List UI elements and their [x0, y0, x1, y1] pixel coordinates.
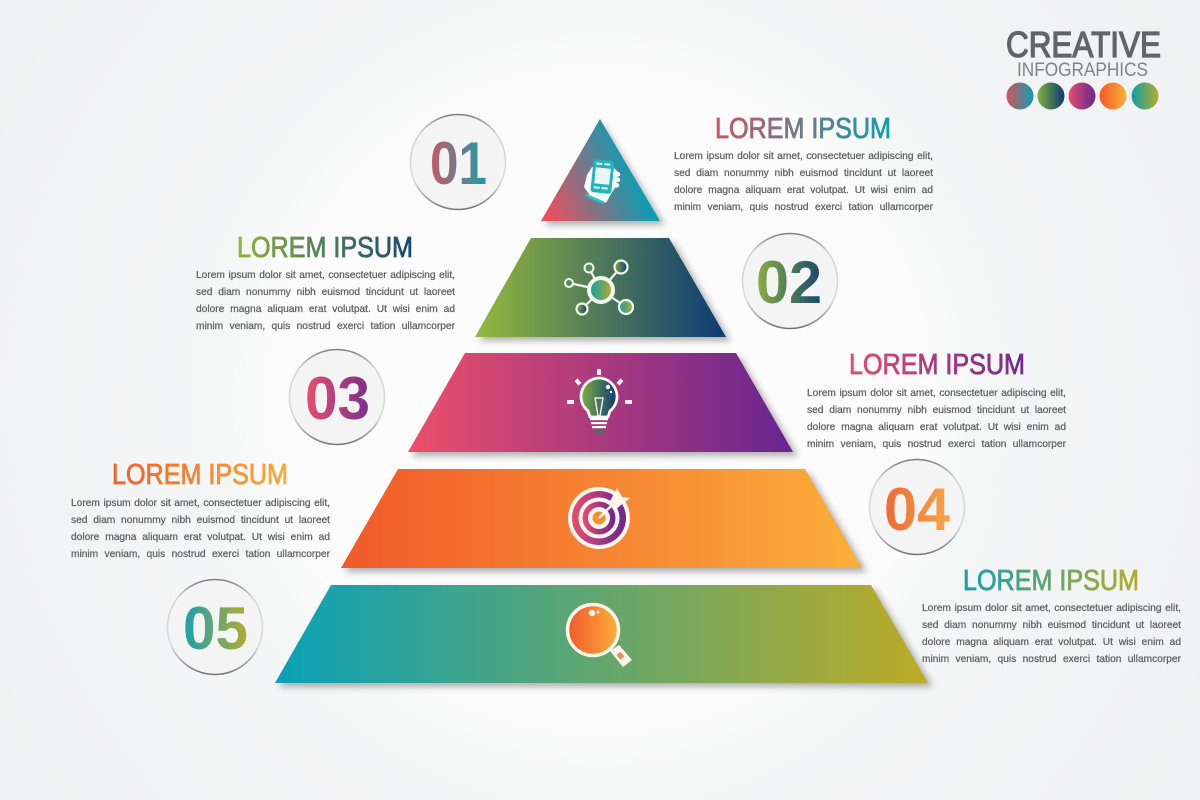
- heading 1: LOREM IPSUM: [715, 113, 891, 145]
- text block 2: sed diam nonummy nibh euismod tincidunt ut laoreet: [196, 287, 455, 298]
- number badge 05: [168, 580, 262, 674]
- number badge 01: 01: [430, 130, 487, 197]
- text block 2: minim veniam, quis nostrud exerci tation ullamcorper: [196, 321, 455, 332]
- text block 2: [196, 270, 455, 332]
- text block 5: minim veniam, quis nostrud exerci tation ullamcorper: [922, 654, 1181, 665]
- text block 4: sed diam nonummy nibh euismod tincidunt ut laoreet: [71, 515, 330, 526]
- heading 4: LOREM IPSUM: [112, 459, 288, 491]
- number badge 02: [742, 234, 838, 328]
- icon: network nodes: [565, 260, 633, 314]
- text block 4: minim veniam, quis nostrud exerci tation ullamcorper: [71, 549, 330, 560]
- icon: target with arrow: [568, 487, 630, 549]
- heading 3: LOREM IPSUM: [849, 349, 1025, 381]
- number badge 03: 03: [305, 365, 370, 432]
- text block 3: sed diam nonummy nibh euismod tincidunt ut laoreet: [807, 405, 1066, 416]
- number badge 04: [870, 460, 964, 554]
- logo: [1006, 24, 1161, 110]
- text block 5: Lorem ipsum dolor sit amet, consectetuer adipiscing elit,: [922, 603, 1181, 614]
- text block 5: dolore magna aliquam erat volutpat. Ut wisi enim ad: [922, 637, 1181, 648]
- text block 3: minim veniam, quis nostrud exerci tation ullamcorper: [807, 439, 1066, 450]
- logo title: CREATIVE: [1006, 24, 1161, 65]
- pyramid tier 2: [475, 238, 731, 341]
- number badge 03: [290, 350, 384, 444]
- heading 2: LOREM IPSUM: [237, 232, 413, 264]
- icon: light bulb: [567, 369, 632, 434]
- text block 1: dolore magna aliquam erat volutpat. Ut wisi enim ad: [674, 185, 933, 196]
- text block 4: Lorem ipsum dolor sit amet, consectetuer adipiscing elit,: [71, 498, 330, 509]
- pyramid tier 3: [408, 353, 798, 456]
- text block 3: dolore magna aliquam erat volutpat. Ut wisi enim ad: [807, 422, 1066, 433]
- text block 3: [807, 388, 1066, 450]
- pyramid tier 1: [541, 119, 665, 225]
- pyramid tier 4: [341, 469, 867, 572]
- heading 5: LOREM IPSUM: [963, 565, 1139, 597]
- text block 5: [922, 603, 1181, 665]
- text block 2: Lorem ipsum dolor sit amet, consectetuer adipiscing elit,: [196, 270, 455, 281]
- number badge 04: 04: [884, 476, 951, 543]
- text block 1: sed diam nonummy nibh euismod tincidunt ut laoreet: [674, 168, 933, 179]
- logo colour dots: [1006, 82, 1158, 110]
- text block 1: Lorem ipsum dolor sit amet, consectetuer adipiscing elit,: [674, 151, 933, 162]
- text block 2: dolore magna aliquam erat volutpat. Ut wisi enim ad: [196, 304, 455, 315]
- text block 5: sed diam nonummy nibh euismod tincidunt ut laoreet: [922, 620, 1181, 631]
- text block 4: [71, 498, 330, 560]
- text block 4: dolore magna aliquam erat volutpat. Ut wisi enim ad: [71, 532, 330, 543]
- logo subtitle: INFOGRAPHICS: [1017, 59, 1148, 81]
- number badge 02: 02: [756, 249, 822, 316]
- pyramid tier 5: [275, 585, 933, 687]
- text block 1: [674, 151, 933, 213]
- text block 1: minim veniam, quis nostrud exerci tation ullamcorper: [674, 202, 933, 213]
- icon: hand holding phone: [584, 159, 620, 203]
- number badge 05: 05: [183, 595, 248, 662]
- pyramid: [275, 119, 933, 687]
- number badge 01: [410, 114, 506, 210]
- icon: magnifying glass: [568, 604, 632, 667]
- text block 3: Lorem ipsum dolor sit amet, consectetuer adipiscing elit,: [807, 388, 1066, 399]
